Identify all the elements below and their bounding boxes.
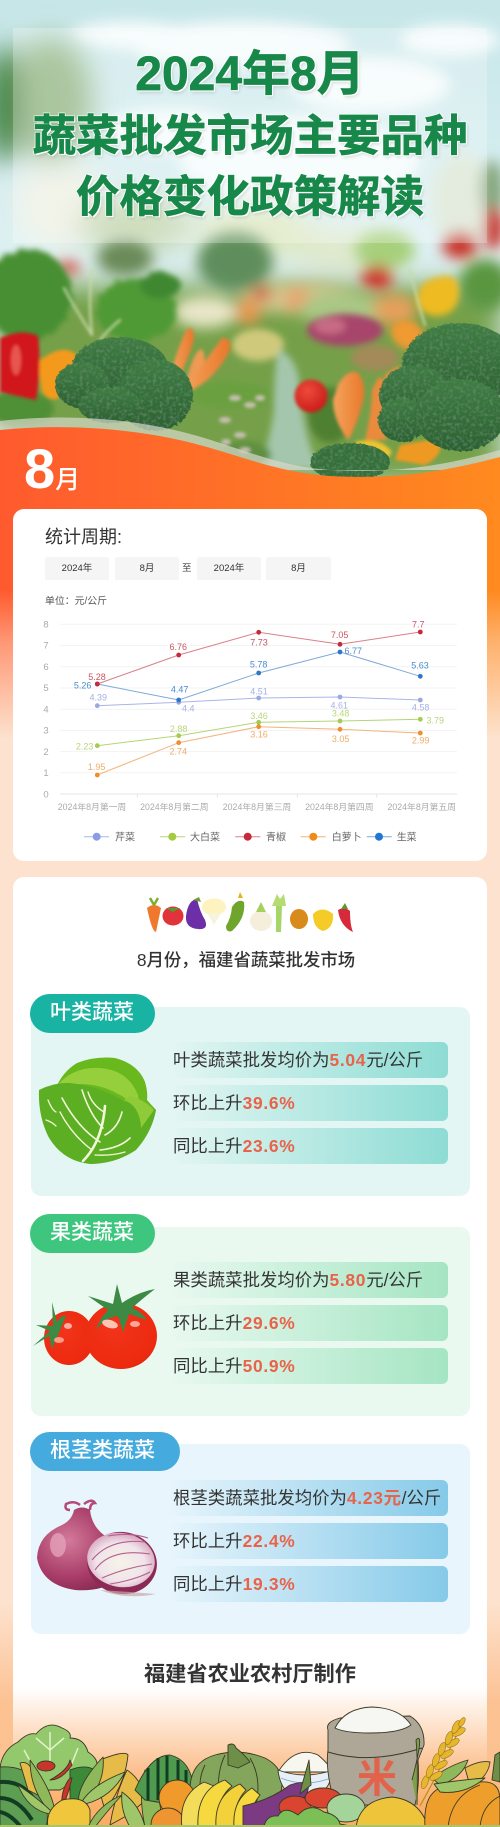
series: 大白菜: 3.46 — [250, 711, 268, 721]
series: 白萝卜: 3.16 — [250, 730, 268, 740]
green pumpkin — [190, 1744, 282, 1805]
wheat — [412, 1716, 467, 1806]
text: 同比上升23.6% — [173, 1136, 295, 1156]
line chart: 3 — [43, 726, 49, 736]
text: 果类蔬菜批发均价为5.80元/公斤 — [173, 1270, 423, 1290]
eggplant — [243, 1760, 311, 1827]
chart legend — [84, 830, 417, 844]
text: 8月 — [291, 563, 306, 574]
tag: root vegetables — [30, 1432, 180, 1471]
yellow melon — [356, 1797, 428, 1827]
heading: statistics period: 统计周期: — [45, 527, 122, 547]
series: 青椒: 7.7 — [412, 620, 425, 630]
panel: price chart card — [13, 509, 487, 861]
line chart: 2024年8月第二周 — [140, 801, 209, 812]
text: 2024年 — [62, 563, 92, 574]
chart legend: 大白菜 — [190, 830, 220, 844]
text: 8月 — [140, 563, 154, 574]
orange wave background — [0, 418, 500, 732]
text: 同比上升50.9% — [173, 1356, 295, 1376]
stat rows: root vegetables — [173, 1480, 448, 1602]
corn — [18, 1753, 146, 1825]
leafy greens — [0, 249, 270, 426]
text: 环比上升22.4% — [173, 1531, 295, 1551]
series: 白萝卜: 3.05 — [332, 734, 349, 744]
pebbles — [219, 395, 265, 453]
series: 白萝卜: 1.95 — [88, 762, 105, 772]
green melon — [327, 1794, 365, 1822]
series: 青椒: 7.73 — [250, 637, 268, 647]
tomatoes — [279, 1788, 341, 1818]
right broccoli — [378, 323, 500, 451]
credit line: 福建省农业农村厅制作 — [144, 1663, 356, 1686]
panel: fruit vegetables — [31, 1227, 470, 1416]
text: 至 — [182, 563, 192, 574]
stat rows: fruit vegetables — [173, 1262, 448, 1384]
panel: root vegetables — [31, 1444, 470, 1634]
panel: leafy vegetables — [31, 1007, 470, 1196]
panel: category card — [13, 877, 487, 1827]
icon: onion — [37, 1500, 157, 1596]
chili peppers — [37, 1760, 72, 1810]
striped watermelon — [135, 1755, 193, 1805]
sack mark: 米 — [357, 1757, 397, 1801]
tag: leafy vegetables — [30, 994, 155, 1033]
text: 2024年 — [214, 563, 244, 574]
title: 价格变化政策解读 — [76, 174, 424, 222]
series: 大白菜 — [76, 708, 444, 752]
line chart: 0 — [43, 790, 49, 800]
chart legend: 白萝卜 — [332, 830, 362, 844]
line chart: 2 — [43, 747, 49, 758]
line chart — [43, 620, 457, 844]
line chart: 4 — [43, 704, 49, 716]
translucent title panel — [13, 28, 487, 243]
line chart: 2024年8月第四周 — [305, 801, 374, 812]
title: 蔬菜批发市场主要品种 — [32, 113, 468, 161]
series: 芹菜: 4.58 — [412, 703, 429, 713]
series: 芹菜: 4.39 — [90, 692, 107, 702]
clouds — [70, 21, 500, 205]
text: 根茎类蔬菜批发均价为4.23元/公斤 — [173, 1488, 441, 1508]
tag: root vegetables: 根茎类蔬菜 — [50, 1439, 155, 1462]
left watermelon — [0, 1767, 100, 1827]
line chart: 5 — [43, 683, 49, 694]
title: 2024年8月 — [135, 48, 365, 101]
blurred backdrop vegetables — [0, 38, 500, 485]
tag: fruit vegetables — [30, 1214, 155, 1253]
line chart: 7 — [43, 641, 49, 652]
line chart: 1 — [43, 768, 49, 779]
chart legend: 生菜 — [397, 830, 417, 844]
series: 生菜 — [74, 646, 429, 702]
month label: 8月 — [24, 437, 80, 500]
wispy stems — [64, 270, 425, 340]
left broccoli — [55, 337, 193, 431]
text: 叶类蔬菜批发均价为5.04元/公斤 — [173, 1050, 423, 1070]
text: 同比上升19.3% — [173, 1574, 295, 1594]
series: 白萝卜: 2.74 — [170, 747, 187, 757]
icon: tomatoes — [33, 1284, 157, 1369]
series: 大白菜: 2.88 — [170, 724, 187, 734]
line chart: 2024年8月第五周 — [387, 801, 456, 812]
icon: row of vegetable characters — [147, 892, 353, 932]
side margin right fading to orange — [487, 1600, 500, 1770]
icon: cabbage — [38, 1058, 156, 1164]
series: 芹菜: 4.51 — [250, 687, 268, 697]
series: 芹菜: 4.4 — [182, 704, 195, 714]
series: 青椒: 7.05 — [331, 630, 348, 640]
text: 环比上升39.6% — [173, 1093, 295, 1113]
subheading: market statement: 8月份，福建省蔬菜批发市场 — [137, 950, 355, 970]
line chart: 8 — [43, 620, 49, 630]
small broccoli — [310, 443, 390, 481]
yellow fruit and leaves — [48, 1770, 161, 1827]
chart legend: 青椒 — [266, 830, 286, 844]
tag: fruit vegetables: 果类蔬菜 — [50, 1221, 134, 1244]
series: 生菜: 5.63 — [411, 660, 429, 670]
series: 白萝卜: 2.99 — [412, 736, 429, 746]
lettuce — [0, 1725, 97, 1790]
text: 环比上升29.6% — [173, 1313, 295, 1333]
side margin left fading to orange — [0, 1600, 13, 1770]
series: 白萝卜 — [88, 724, 429, 777]
title — [32, 48, 468, 222]
series: 大白菜: 2.23 — [76, 742, 93, 752]
chart legend: 芹菜 — [115, 832, 135, 844]
oranges — [151, 1780, 195, 1827]
line chart: 2024年8月第三周 — [223, 801, 291, 812]
series: 青椒: 6.76 — [170, 642, 187, 652]
series: 青椒 — [88, 620, 425, 686]
tag: leafy vegetables: 叶类蔬菜 — [50, 1001, 134, 1024]
bananas — [181, 1780, 260, 1827]
series: 芹菜 — [90, 687, 429, 714]
bottom gradient background — [0, 1688, 500, 1827]
line chart: 2024年8月第一周 — [58, 801, 126, 812]
stat rows: leafy vegetables — [173, 1042, 448, 1164]
rice bowl — [278, 1752, 333, 1798]
series: 青椒: 5.28 — [88, 672, 106, 682]
series: 生菜: 5.26 — [74, 680, 91, 690]
lettuce front — [264, 1808, 355, 1827]
red pepper and orange pepper — [0, 332, 77, 400]
series: 生菜: 4.47 — [171, 684, 188, 694]
series: 生菜: 5.78 — [250, 660, 267, 670]
series: 生菜: 6.77 — [345, 646, 362, 656]
line chart: 6 — [43, 662, 49, 673]
bottom illustration: harvest of vegetables — [0, 1706, 500, 1827]
series: 芹菜: 4.61 — [331, 700, 348, 710]
series: 大白菜: 3.48 — [332, 708, 349, 718]
period selectors — [45, 557, 331, 580]
corn and leaves on right — [432, 1760, 490, 1792]
orange pumpkin — [425, 1752, 500, 1827]
rice sack — [327, 1707, 424, 1805]
carrots — [170, 328, 441, 470]
hero photo: vegetables — [0, 0, 500, 477]
unit label: 单位：元/公斤 — [45, 596, 107, 607]
series: 大白菜: 3.79 — [427, 715, 444, 725]
